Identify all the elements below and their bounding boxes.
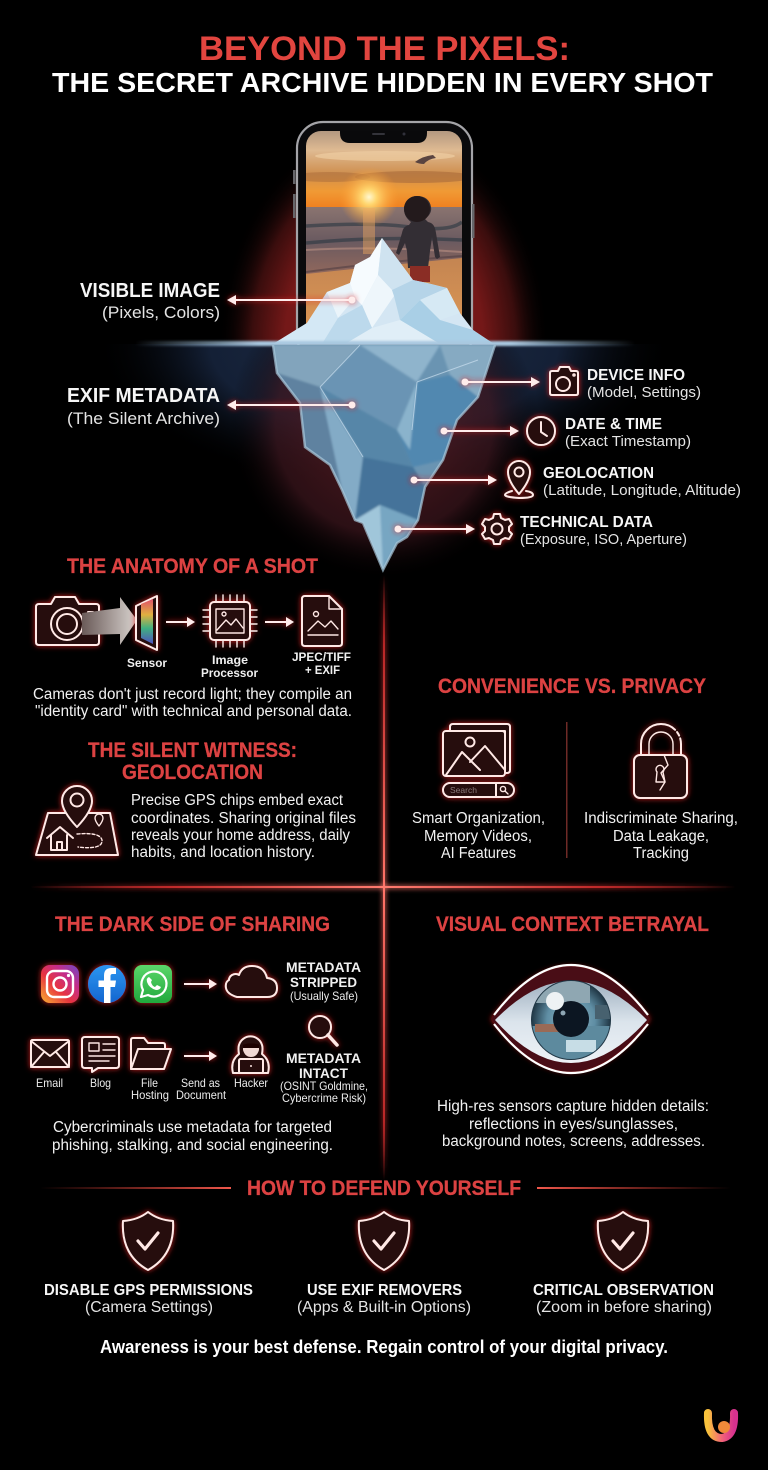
labels: Sensor: [127, 656, 167, 670]
callout: exif metadata: (The Silent Archive): [67, 409, 220, 428]
text: benefits: Memory Videos,: [424, 828, 532, 845]
heading: THE SILENT WITNESS:: [88, 739, 297, 762]
panel: convenience vs privacy: [412, 675, 738, 862]
title: [52, 30, 713, 98]
divider: horizontal: [30, 885, 736, 889]
child silhouette: [396, 196, 440, 282]
icon: eye with reflections: [491, 965, 650, 1073]
text: benefits: AI Features: [441, 845, 516, 862]
panel: visual context betrayal: [436, 913, 709, 1150]
heading: THE DARK SIDE OF SHARING: [55, 913, 330, 936]
closing line: Awareness is your best defense. Regain control of your digital privacy.: [100, 1337, 668, 1357]
panel: anatomy of a shot: [33, 555, 352, 720]
body text: [131, 792, 356, 861]
body text: reflections in eyes/sunglasses,: [469, 1116, 678, 1133]
logo: [708, 1413, 734, 1438]
item: exif removers: [297, 1212, 471, 1316]
callout: visible image: (Pixels, Colors): [102, 303, 220, 322]
text: risks: Tracking: [633, 845, 689, 862]
heading: VISUAL CONTEXT BETRAYAL: [436, 913, 709, 936]
text: metadata stripped: METADATA: [286, 959, 361, 975]
icon labels: Email: [36, 1076, 63, 1090]
text: metadata intact: METADATA: [286, 1050, 361, 1066]
item: disable gps: (Camera Settings): [85, 1299, 213, 1316]
iceberg below water: [273, 345, 495, 570]
callout: visible image: VISIBLE IMAGE: [80, 280, 220, 302]
icon: shield: [598, 1212, 648, 1270]
icon labels: Blog: [90, 1076, 111, 1090]
icon: hacker: [232, 1036, 269, 1073]
callout: device info: (Model, Settings): [587, 384, 701, 401]
divider: [566, 722, 568, 858]
heading: CONVENIENCE VS. PRIVACY: [438, 675, 706, 698]
text: benefits: [412, 810, 545, 862]
arrow: [184, 979, 217, 989]
icon labels: File: [141, 1076, 158, 1090]
text: metadata stripped: (Usually Safe): [290, 989, 358, 1003]
callout: exif metadata: [67, 385, 356, 428]
body text: background notes, screens, addresses.: [442, 1133, 705, 1150]
labels: + EXIF: [305, 663, 340, 677]
body text: Cybercriminals use metadata for targeted: [53, 1119, 332, 1136]
icon: camera: [550, 367, 578, 395]
text: metadata intact: (OSINT Goldmine,: [280, 1079, 368, 1093]
panel: how to defend yourself: [40, 1177, 731, 1357]
callout: geolocation: (Latitude, Longitude, Altitude): [543, 482, 741, 499]
callout: geolocation: GEOLOCATION: [543, 465, 654, 482]
item: exif removers: (Apps & Built-in Options): [297, 1299, 471, 1316]
arrow: [184, 1051, 217, 1061]
icon: magnifier: [309, 1016, 337, 1045]
text: metadata intact: INTACT: [299, 1065, 348, 1081]
callout: visible image: [80, 280, 356, 322]
body text: phishing, stalking, and social engineering.: [52, 1137, 333, 1154]
text: metadata intact: Cybercrime Risk): [282, 1091, 366, 1105]
callout: geolocation: [410, 461, 741, 499]
body text: coordinates. Sharing original files: [131, 810, 356, 827]
body text: Cameras don't just record light; they compile an: [33, 686, 352, 703]
icon: envelope: [31, 1040, 69, 1067]
item: critical observation: CRITICAL OBSERVATION: [533, 1282, 714, 1299]
icon: gear: [482, 514, 512, 544]
icon: sensor: [136, 596, 157, 650]
labels: [127, 650, 351, 680]
callout: technical data: (Exposure, ISO, Aperture): [520, 531, 687, 548]
callout: device info: [462, 367, 701, 401]
icon: file: [302, 596, 342, 646]
icon labels: Hacker: [234, 1076, 268, 1090]
item: critical observation: [533, 1212, 714, 1316]
phone with sunset photo: [290, 122, 475, 362]
search placeholder: Search: [450, 785, 477, 795]
divider: vertical: [382, 575, 386, 1180]
icon: image processor chip: [203, 595, 257, 647]
callout: technical data: [394, 514, 687, 548]
text: risks: [584, 810, 738, 862]
heading: HOW TO DEFEND YOURSELF: [247, 1177, 521, 1200]
icon: blog speech bubble: [82, 1037, 119, 1072]
body text: [33, 686, 352, 720]
heading: GEOLOCATION: [122, 761, 263, 784]
text: benefits: Smart Organization,: [412, 810, 545, 827]
icon labels: Document: [176, 1088, 227, 1102]
icon labels: Hosting: [131, 1088, 169, 1102]
heading: THE ANATOMY OF A SHOT: [67, 555, 318, 578]
text: metadata stripped: STRIPPED: [290, 974, 357, 990]
icon: location pin: [505, 461, 533, 498]
labels: JPEC/TIFF: [292, 650, 351, 664]
body text: [52, 1119, 333, 1154]
body text: Precise GPS chips embed exact: [131, 792, 344, 809]
icon: map with pin and house: [36, 786, 118, 855]
body text: [437, 1098, 709, 1150]
iceberg above water: [273, 238, 494, 344]
heading: [88, 739, 297, 784]
labels: Image: [212, 653, 248, 667]
icon: photo gallery with search bar: [443, 724, 514, 797]
icon labels: Send as: [181, 1076, 220, 1090]
item: disable gps: [44, 1212, 253, 1316]
body text: High-res sensors capture hidden details:: [437, 1098, 709, 1115]
panel: silent witness geolocation: [36, 739, 356, 861]
light beam: [82, 597, 137, 645]
icon: folder: [131, 1038, 171, 1069]
labels: Processor: [201, 666, 258, 680]
title: BEYOND THE PIXELS:: [199, 30, 570, 68]
item: exif removers: USE EXIF REMOVERS: [307, 1282, 462, 1299]
item: disable gps: DISABLE GPS PERMISSIONS: [44, 1282, 253, 1299]
icon: instagram: [41, 965, 79, 1003]
icon: whatsapp: [134, 965, 172, 1003]
body text: reveals your home address, daily: [131, 827, 350, 844]
icon: cloud: [226, 966, 277, 997]
callout: date and time: (Exact Timestamp): [565, 433, 691, 450]
panel: dark side of sharing: [31, 913, 368, 1154]
text: risks: Data Leakage,: [613, 828, 709, 845]
item: critical observation: (Zoom in before sharing): [536, 1299, 712, 1316]
arrow: [265, 617, 294, 627]
body text: habits, and location history.: [131, 844, 315, 861]
waterline: [135, 341, 635, 346]
icon: cracked padlock: [634, 724, 687, 798]
arrow: [166, 617, 195, 627]
text: metadata intact: [280, 1050, 368, 1105]
callout: date and time: [440, 416, 691, 450]
title: THE SECRET ARCHIVE HIDDEN IN EVERY SHOT: [52, 67, 713, 98]
callout: technical data: TECHNICAL DATA: [520, 514, 653, 531]
icon labels: [36, 1076, 268, 1102]
icon: facebook: [88, 965, 126, 1003]
icon: shield: [359, 1212, 409, 1270]
icon: clock: [527, 417, 555, 445]
callout: date and time: DATE & TIME: [565, 416, 662, 433]
callout: exif metadata: EXIF METADATA: [67, 385, 220, 407]
background glow behind phone and iceberg: [94, 100, 674, 584]
text: risks: Indiscriminate Sharing,: [584, 810, 738, 827]
callout: device info: DEVICE INFO: [587, 367, 685, 384]
text: metadata stripped: [286, 959, 361, 1003]
body text: "identity card" with technical and personal data.: [35, 703, 352, 720]
icon: shield: [123, 1212, 173, 1270]
icon: camera: [36, 597, 99, 645]
